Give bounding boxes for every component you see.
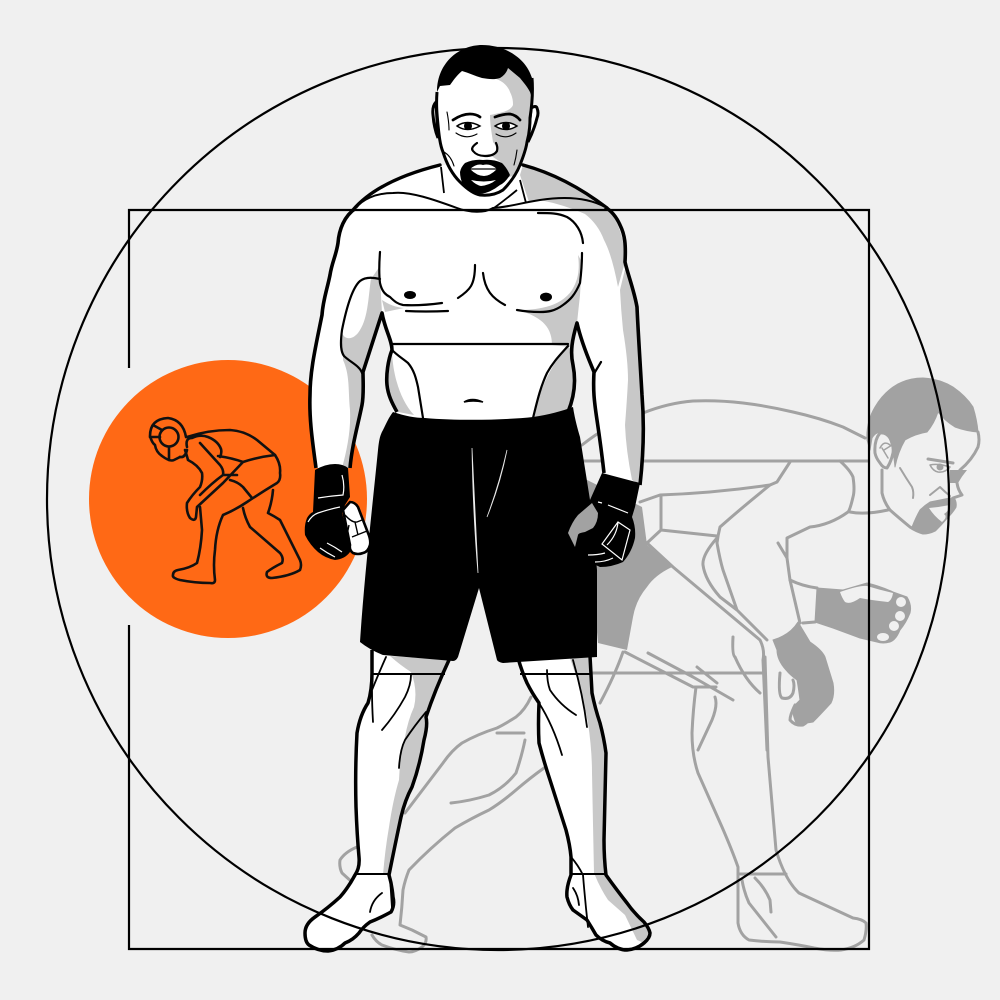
neck and traps bbox=[353, 165, 607, 216]
ghost lower legs bbox=[340, 697, 544, 952]
ghost figure: crouching fighter bbox=[340, 378, 979, 952]
orange circle badge bbox=[89, 360, 367, 638]
face bbox=[437, 45, 532, 195]
brows, eyes and nose bbox=[444, 112, 520, 166]
shorts bbox=[360, 407, 597, 663]
ghost thigh lines bbox=[592, 543, 866, 950]
ghost far glove bbox=[815, 583, 911, 643]
ears bbox=[433, 102, 538, 142]
ghost near glove bbox=[773, 622, 834, 725]
proportion guide lines bbox=[355, 674, 606, 874]
ghost torso and back bbox=[582, 401, 865, 445]
right glove bbox=[568, 473, 640, 567]
head bbox=[433, 45, 538, 195]
right leg bbox=[518, 656, 650, 950]
hair bbox=[437, 45, 532, 95]
left glove bbox=[305, 464, 370, 560]
ghost shorts bbox=[583, 478, 672, 650]
shorts highlights bbox=[472, 448, 507, 573]
main figure: standing fighter bbox=[305, 45, 650, 951]
ghost head bbox=[867, 378, 979, 533]
head outline bbox=[437, 78, 532, 195]
geometric frame: square bbox=[129, 210, 869, 949]
left leg bbox=[305, 650, 449, 951]
chest and muscle lines bbox=[341, 213, 601, 418]
torso and arms bbox=[310, 193, 643, 485]
goatee and mouth bbox=[460, 160, 510, 194]
face shadow bbox=[490, 68, 532, 180]
icon: crouching wrestler bbox=[150, 418, 301, 583]
